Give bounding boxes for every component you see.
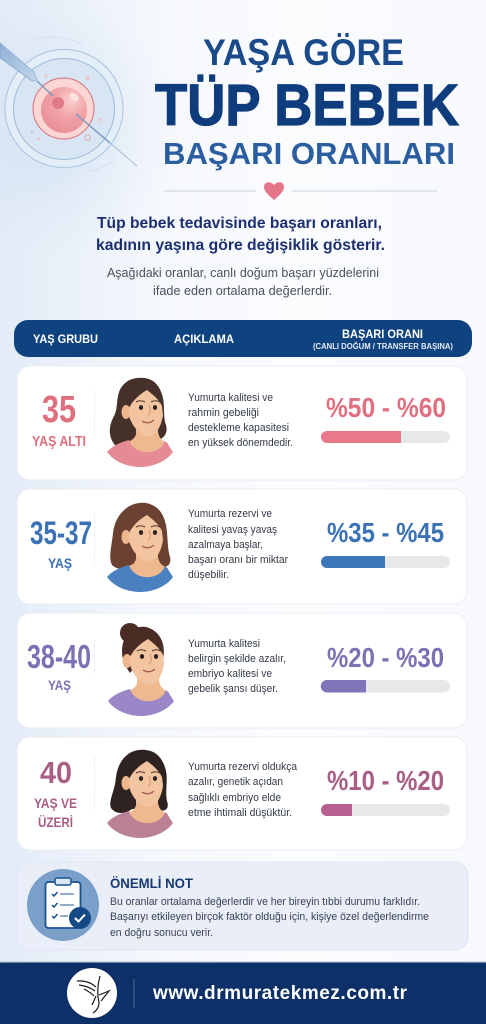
description: Yumurta rezervi oldukça	[188, 761, 298, 773]
title: TÜP BEBEK	[155, 73, 459, 138]
panel: 38-40 yaş	[17, 613, 467, 728]
age label	[34, 755, 77, 830]
title	[155, 32, 459, 171]
panel: important note	[17, 862, 468, 950]
description: Yumurta rezervi ve	[188, 508, 272, 520]
description: en yüksek dönemdedir.	[188, 437, 293, 449]
intro text	[96, 215, 385, 298]
table header: AÇIKLAMA	[174, 332, 234, 346]
title: YAŞA GÖRE	[203, 32, 404, 73]
description: azalmaya başlar,	[188, 539, 263, 551]
intro text: ifade eden ortalama değerlerdir.	[153, 283, 332, 298]
progress bar	[321, 804, 450, 816]
intro text: kadının yaşına göre değişiklik gösterir.	[96, 237, 385, 254]
success rate: %20 - %30	[327, 642, 444, 673]
age label: YAŞ ALTI	[32, 433, 86, 450]
description: düşebilir.	[188, 569, 229, 581]
age label: ÜZERİ	[38, 814, 73, 830]
avatar: woman with brown bob	[107, 503, 173, 592]
avatar: woman with dark bob	[107, 750, 173, 838]
success rate: %50 - %60	[326, 392, 446, 423]
icon: clipboard with check	[27, 869, 99, 941]
description: kalitesi yavaş yavaş	[188, 524, 277, 536]
description: embriyo kalitesi ve	[188, 668, 272, 680]
table header: (CANLI DOĞUM / TRANSFER BAŞINA)	[313, 342, 453, 351]
progress bar	[321, 680, 450, 692]
progress bar	[321, 556, 450, 568]
progress bar	[321, 431, 450, 443]
description: başarı oranı bir miktar	[188, 554, 288, 566]
footer	[0, 961, 486, 1024]
age label: 40	[40, 755, 72, 790]
description: gebelik şansı düşer.	[188, 683, 278, 695]
success rate: %35 - %45	[327, 517, 444, 548]
description	[188, 508, 288, 581]
note text: Başarıyı etkileyen birçok faktör olduğu için, kişiye özel değerlendirme	[110, 911, 429, 923]
intro text: Aşağıdaki oranlar, canlı doğum başarı yüzdelerini	[107, 265, 379, 280]
success rate: %10 - %20	[327, 765, 444, 796]
description	[188, 638, 286, 695]
description: destekleme kapasitesi	[188, 422, 289, 434]
description: sağlıklı embriyo elde	[188, 792, 281, 804]
age label: YAŞ	[48, 555, 72, 571]
age label: YAŞ VE	[34, 795, 77, 811]
illustration: egg cell with pipette and needle	[0, 37, 137, 172]
table header	[14, 320, 472, 357]
panel: 35 yaş altı	[17, 366, 467, 480]
panel: 35-37 yaş	[17, 489, 467, 604]
description: azalır, genetik açıdan	[188, 776, 283, 788]
description: Yumurta kalitesi	[188, 638, 260, 650]
table header: BAŞARI ORANI	[342, 327, 423, 341]
icon: heart	[264, 182, 284, 200]
age label: YAŞ	[48, 677, 71, 693]
description: rahmin gebeliği	[188, 407, 259, 419]
age label	[32, 389, 86, 450]
description: etme ihtimali düşüktür.	[188, 807, 292, 819]
panel: 40 yaş ve üzeri	[17, 737, 467, 850]
logo	[67, 968, 117, 1018]
table header: YAŞ GRUBU	[33, 332, 98, 346]
note text	[110, 896, 429, 939]
description	[188, 392, 293, 449]
note text: en doğru sonucu verir.	[110, 927, 213, 939]
description: Yumurta kalitesi ve	[188, 392, 273, 404]
note text: Bu oranlar ortalama değerlerdir ve her bireyin tıbbi durumu farklıdır.	[110, 896, 420, 908]
age label: 35-37	[30, 515, 92, 551]
age label	[27, 638, 91, 693]
description	[188, 761, 298, 819]
note heading: ÖNEMLİ NOT	[110, 876, 194, 891]
avatar: woman with hair bun	[108, 623, 174, 716]
description: belirgin şekilde azalır,	[188, 653, 286, 665]
age label: 35	[42, 389, 76, 431]
age label	[30, 515, 92, 571]
website url: www.drmuratekmez.com.tr	[152, 983, 408, 1004]
title: BAŞARI ORANLARI	[163, 136, 455, 171]
avatar: young woman	[107, 378, 173, 467]
intro text: Tüp bebek tedavisinde başarı oranları,	[97, 215, 382, 232]
age label: 38-40	[27, 638, 91, 675]
